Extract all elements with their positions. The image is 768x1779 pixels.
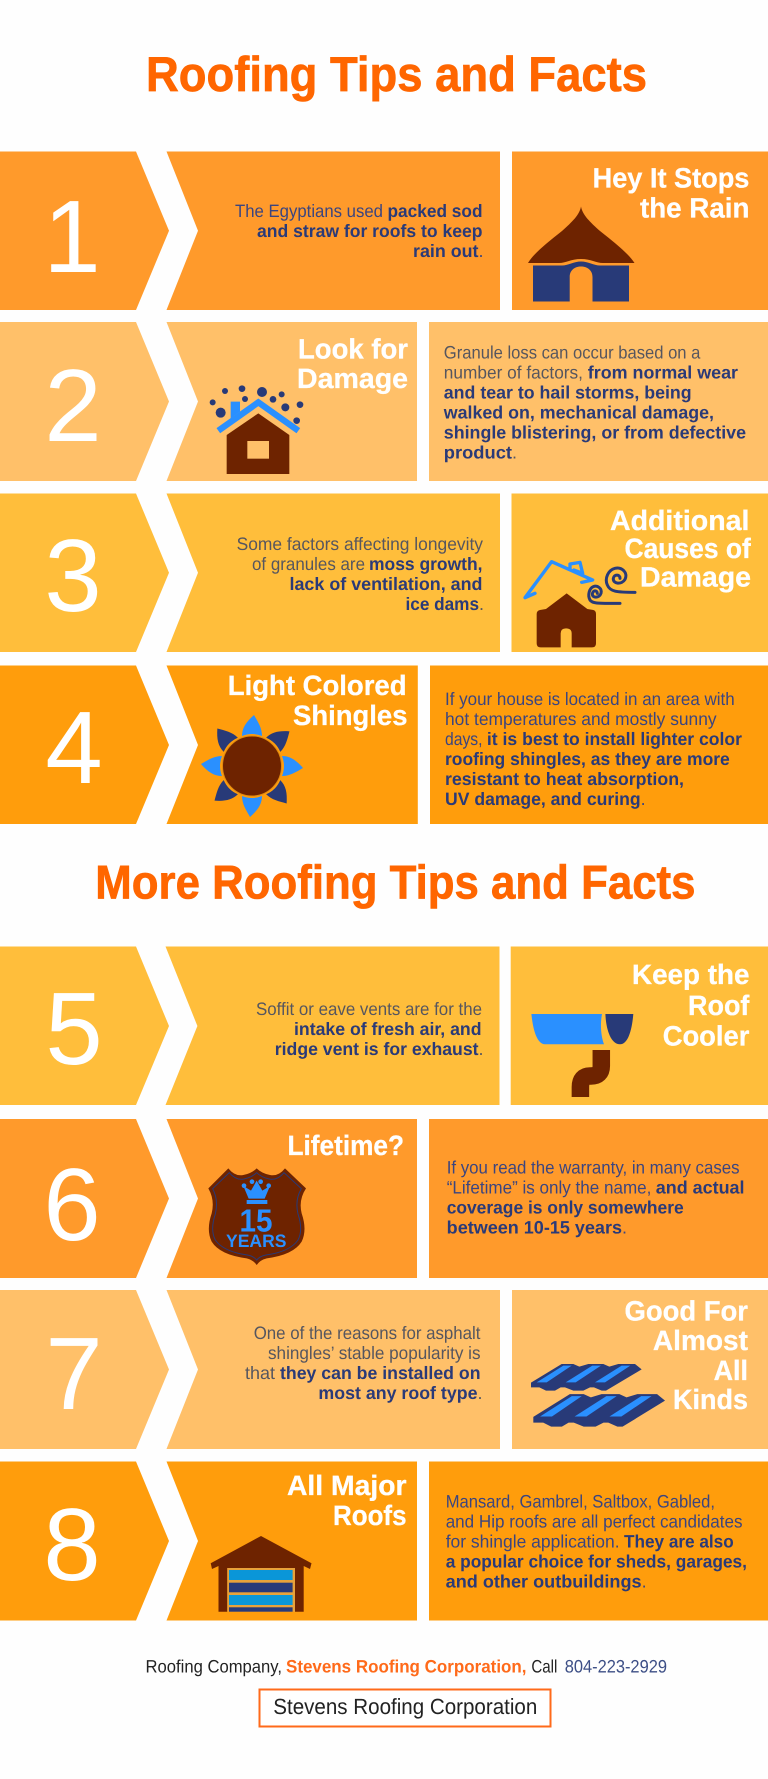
- body text 4: .: [641, 789, 646, 809]
- body text 7: One of the reasons for asphalt: [254, 1323, 480, 1343]
- footer line: Roofing Company,: [146, 1657, 282, 1677]
- heading 3: Causes of: [624, 533, 751, 564]
- icon: shingles: [531, 1364, 665, 1427]
- text panel 1: [166, 152, 500, 310]
- text panel 5: [166, 946, 500, 1105]
- number 4: 4: [45, 690, 103, 805]
- panel: tip 7: [0, 1290, 768, 1449]
- footer button: Stevens Roofing Corporation: [273, 1694, 537, 1719]
- number 5: 5: [45, 971, 103, 1086]
- panel: tip 6: [0, 1119, 768, 1278]
- body text 2: .: [512, 443, 517, 463]
- heading 4: Shingles: [293, 700, 408, 731]
- subtitle: More Roofing Tips and Facts: [95, 856, 696, 909]
- heading 1: [593, 162, 749, 223]
- body text 2: walked on, mechanical damage,: [443, 403, 714, 423]
- heading 7: Almost: [653, 1325, 748, 1356]
- body text 3: lack of ventilation, and: [290, 574, 482, 594]
- body text 3: [237, 534, 484, 614]
- body text 6: coverage is only somewhere: [447, 1197, 684, 1217]
- body text 3: ice dams: [406, 594, 479, 614]
- text panel 6b: [429, 1119, 768, 1278]
- number chevron 8: [0, 1462, 169, 1620]
- body text 5: intake of fresh air, and: [294, 1019, 482, 1039]
- body text 6: and actual: [656, 1177, 744, 1197]
- number 2: 2: [44, 348, 102, 463]
- body text 3: of granules are: [252, 554, 365, 574]
- heading 2: Look for: [298, 334, 408, 365]
- footer line: 804-223-2929: [565, 1657, 667, 1677]
- panel: tip 1: [0, 152, 768, 310]
- heading 1: the Rain: [640, 192, 749, 223]
- number chevron 2: [0, 322, 169, 481]
- body text 5: ridge vent is for exhaust: [275, 1039, 478, 1059]
- body text 2: number of factors,: [444, 363, 583, 383]
- panel: tip 8: [0, 1462, 768, 1620]
- footer button: [260, 1690, 550, 1726]
- number chevron 4: [0, 666, 169, 824]
- heading 5: [632, 959, 750, 1052]
- number chevron 7: [0, 1290, 169, 1449]
- body text 4: it is best to install lighter color: [487, 729, 742, 749]
- title panel 7: [512, 1290, 768, 1449]
- body text 4: hot temperatures and mostly sunny: [445, 709, 717, 729]
- heading 7: [624, 1296, 748, 1415]
- body text 1: .: [478, 241, 484, 261]
- text panel 7: [166, 1290, 500, 1449]
- body text 2: product: [444, 443, 512, 463]
- panel: tip 2: [0, 322, 768, 481]
- text panel 2: [166, 322, 417, 481]
- heading 3: Additional: [610, 505, 749, 536]
- body text 1: [235, 201, 484, 261]
- icon: sun: [201, 715, 303, 817]
- body text 8: a popular choice for sheds, garages,: [446, 1551, 747, 1571]
- body text 4: [445, 689, 742, 809]
- body text 2: [443, 343, 746, 463]
- body text 4: UV damage, and curing: [445, 789, 641, 809]
- number 8: 8: [43, 1487, 101, 1602]
- body text 7: most any roof type: [318, 1383, 478, 1403]
- body text 8: .: [642, 1571, 647, 1591]
- number 7: 7: [45, 1316, 103, 1431]
- body text 6: [447, 1157, 744, 1237]
- body text 8: and Hip roofs are all perfect candidates: [446, 1511, 742, 1531]
- number chevron 6: [0, 1119, 169, 1278]
- body text 7: [245, 1323, 483, 1403]
- text panel 8: [166, 1462, 417, 1620]
- body text 6: “Lifetime” is only the name,: [447, 1177, 651, 1197]
- body text 7: they can be installed on: [280, 1363, 480, 1383]
- text panel 8b: [429, 1462, 768, 1620]
- body text 2: from normal wear: [588, 363, 738, 383]
- number chevron 1: [0, 152, 169, 310]
- title panel 1: [512, 152, 768, 310]
- title panel 3: [512, 494, 768, 652]
- icon: house with wind: [525, 562, 635, 647]
- heading 7: Kinds: [673, 1384, 748, 1415]
- body text 7: .: [478, 1383, 483, 1403]
- body text 6: .: [622, 1217, 627, 1237]
- heading 2: Damage: [297, 363, 408, 394]
- body text 8: They are also: [624, 1531, 734, 1551]
- heading 8: Roofs: [333, 1500, 406, 1531]
- text panel 3: [166, 494, 500, 652]
- number chevron 3: [0, 494, 169, 652]
- heading 5: Roof: [688, 990, 750, 1021]
- footer line: [146, 1657, 667, 1677]
- body text 4: resistant to heat absorption,: [445, 769, 684, 789]
- body text 1: packed sod: [388, 201, 482, 221]
- panel: tip 5: [0, 946, 768, 1105]
- heading 3: [610, 505, 751, 593]
- icon: 15 years shield: [208, 1168, 306, 1265]
- heading 5: Cooler: [663, 1021, 749, 1052]
- text panel 4: [166, 666, 418, 824]
- body text 7: that: [245, 1363, 275, 1383]
- panel: tip 4: [0, 666, 768, 824]
- heading 4: Light Colored: [228, 670, 406, 701]
- icon: house with hail: [210, 385, 303, 474]
- body text 1: and straw for roofs to keep: [257, 221, 482, 241]
- body text 1: The Egyptians used: [235, 201, 383, 221]
- body text 2: and tear to hail storms, being: [444, 383, 692, 403]
- body text 6: between 10-15 years: [447, 1217, 622, 1237]
- body text 3: Some factors affecting longevity: [237, 534, 483, 554]
- body text 6: If you read the warranty, in many cases: [447, 1157, 740, 1177]
- body text 7: shingles’ stable popularity is: [268, 1343, 480, 1363]
- body text 8: [446, 1491, 747, 1591]
- heading 7: All: [714, 1355, 748, 1386]
- body text 5: [256, 999, 484, 1059]
- heading 1: Hey It Stops: [593, 162, 749, 193]
- heading 2: [297, 334, 408, 394]
- footer line: Call: [531, 1657, 557, 1677]
- number chevron 5: [0, 946, 169, 1105]
- footer line: Stevens Roofing Corporation,: [286, 1657, 526, 1677]
- text panel 4b: [430, 666, 768, 824]
- body text 5: Soffit or eave vents are for the: [256, 999, 482, 1019]
- number 1: 1: [43, 179, 101, 294]
- text panel 2b: [429, 322, 768, 481]
- body text 2: Granule loss can occur based on a: [444, 343, 701, 363]
- number 6: 6: [43, 1147, 101, 1262]
- icon: hut: [528, 206, 634, 302]
- icon: garage: [211, 1536, 312, 1612]
- icon: gutter: [531, 1014, 633, 1097]
- heading 8: [287, 1470, 407, 1531]
- body text 1: rain out: [413, 241, 479, 261]
- body text 4: days,: [445, 729, 482, 749]
- body text 4: roofing shingles, as they are more: [445, 749, 730, 769]
- body text 8: for shingle application.: [446, 1531, 620, 1551]
- heading 4: [228, 670, 408, 731]
- icon: 15 years shield: 15: [240, 1202, 272, 1238]
- body text 3: .: [479, 594, 484, 614]
- title: Roofing Tips and Facts: [146, 48, 647, 102]
- icon: 15 years shield: YEARS: [226, 1231, 286, 1251]
- body text 8: Mansard, Gambrel, Saltbox, Gabled,: [446, 1491, 715, 1511]
- heading 8: All Major: [287, 1470, 407, 1501]
- body text 3: moss growth,: [369, 554, 482, 574]
- title panel 5: [511, 946, 768, 1105]
- number 3: 3: [44, 518, 102, 633]
- body text 5: .: [478, 1039, 484, 1059]
- body text 4: If your house is located in an area with: [445, 689, 735, 709]
- panel: tip 3: [0, 494, 768, 652]
- body text 8: and other outbuildings: [446, 1571, 642, 1591]
- heading 3: Damage: [640, 562, 751, 593]
- text panel 6: [166, 1119, 417, 1278]
- heading 6: Lifetime?: [288, 1130, 404, 1161]
- heading 7: Good For: [624, 1296, 748, 1327]
- heading 5: Keep the: [632, 959, 749, 990]
- body text 2: shingle blistering, or from defective: [444, 423, 746, 443]
